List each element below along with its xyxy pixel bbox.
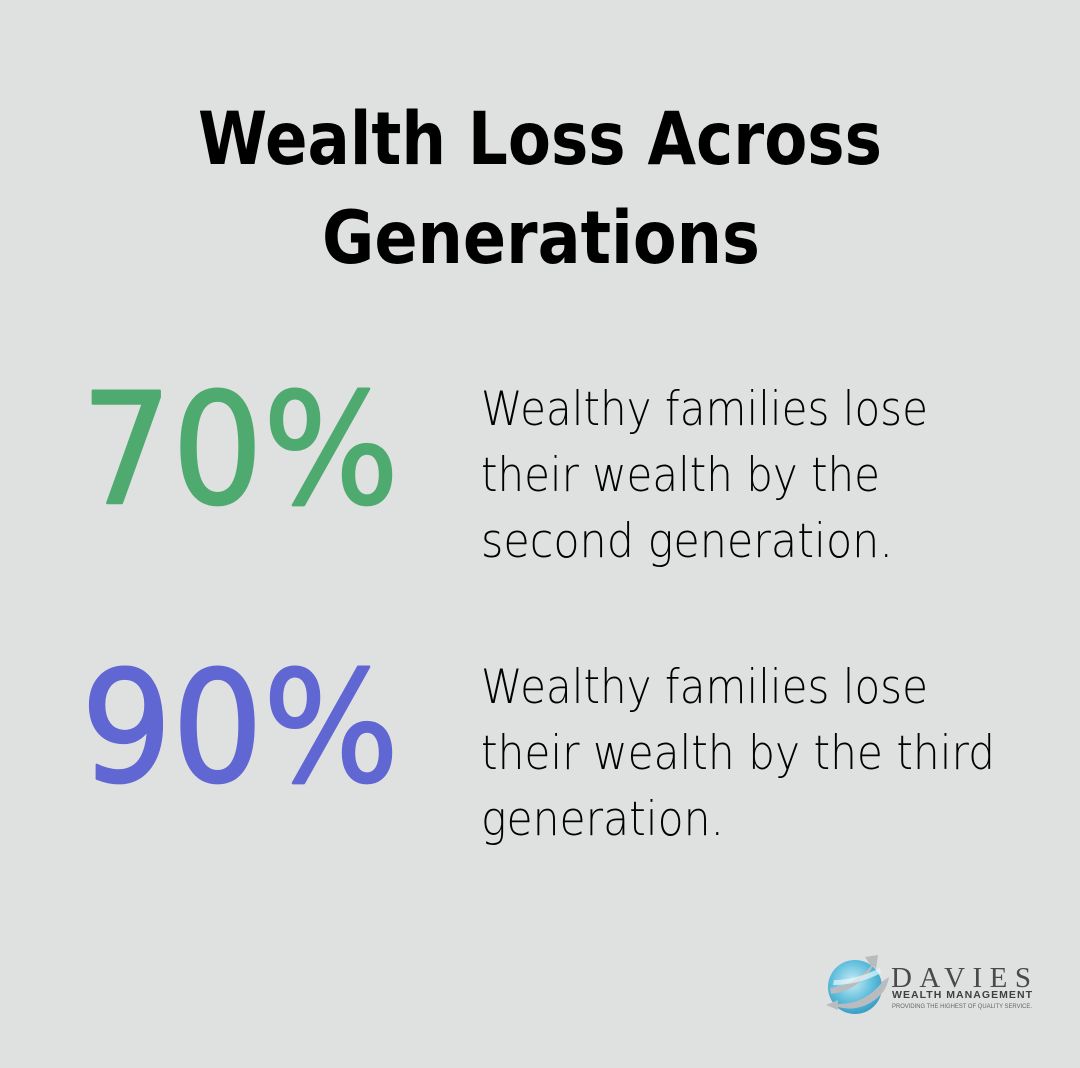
logo: Davies Wealth Management <box>826 955 1033 1014</box>
description 70%: Wealthy families lose <box>481 382 928 437</box>
description 90%: their wealth by the third <box>481 726 995 781</box>
description 90%: generation. <box>481 792 724 847</box>
title <box>198 97 882 281</box>
value 90%: 90% <box>81 639 399 818</box>
wordmark: DAVIES <box>891 962 1031 994</box>
stat: 70% <box>81 361 928 569</box>
title: Generations <box>322 196 760 281</box>
description 90% <box>481 660 995 847</box>
description 70%: their wealth by the <box>481 448 880 503</box>
description 90%: Wealthy families lose <box>481 660 928 715</box>
icon: globe with arrows <box>826 955 889 1014</box>
description 70% <box>481 382 928 569</box>
title: Wealth Loss Across <box>198 97 882 182</box>
value 70%: 70% <box>81 361 399 540</box>
description 70%: second generation. <box>481 514 893 569</box>
stat: 90% <box>81 639 995 847</box>
logo: Davies Wealth Management: WEALTH MANAGEMENT <box>892 989 1033 1001</box>
logo: Davies Wealth Management: PROVIDING THE HIGHEST OF QUALITY SERVICE. <box>892 1003 1032 1010</box>
